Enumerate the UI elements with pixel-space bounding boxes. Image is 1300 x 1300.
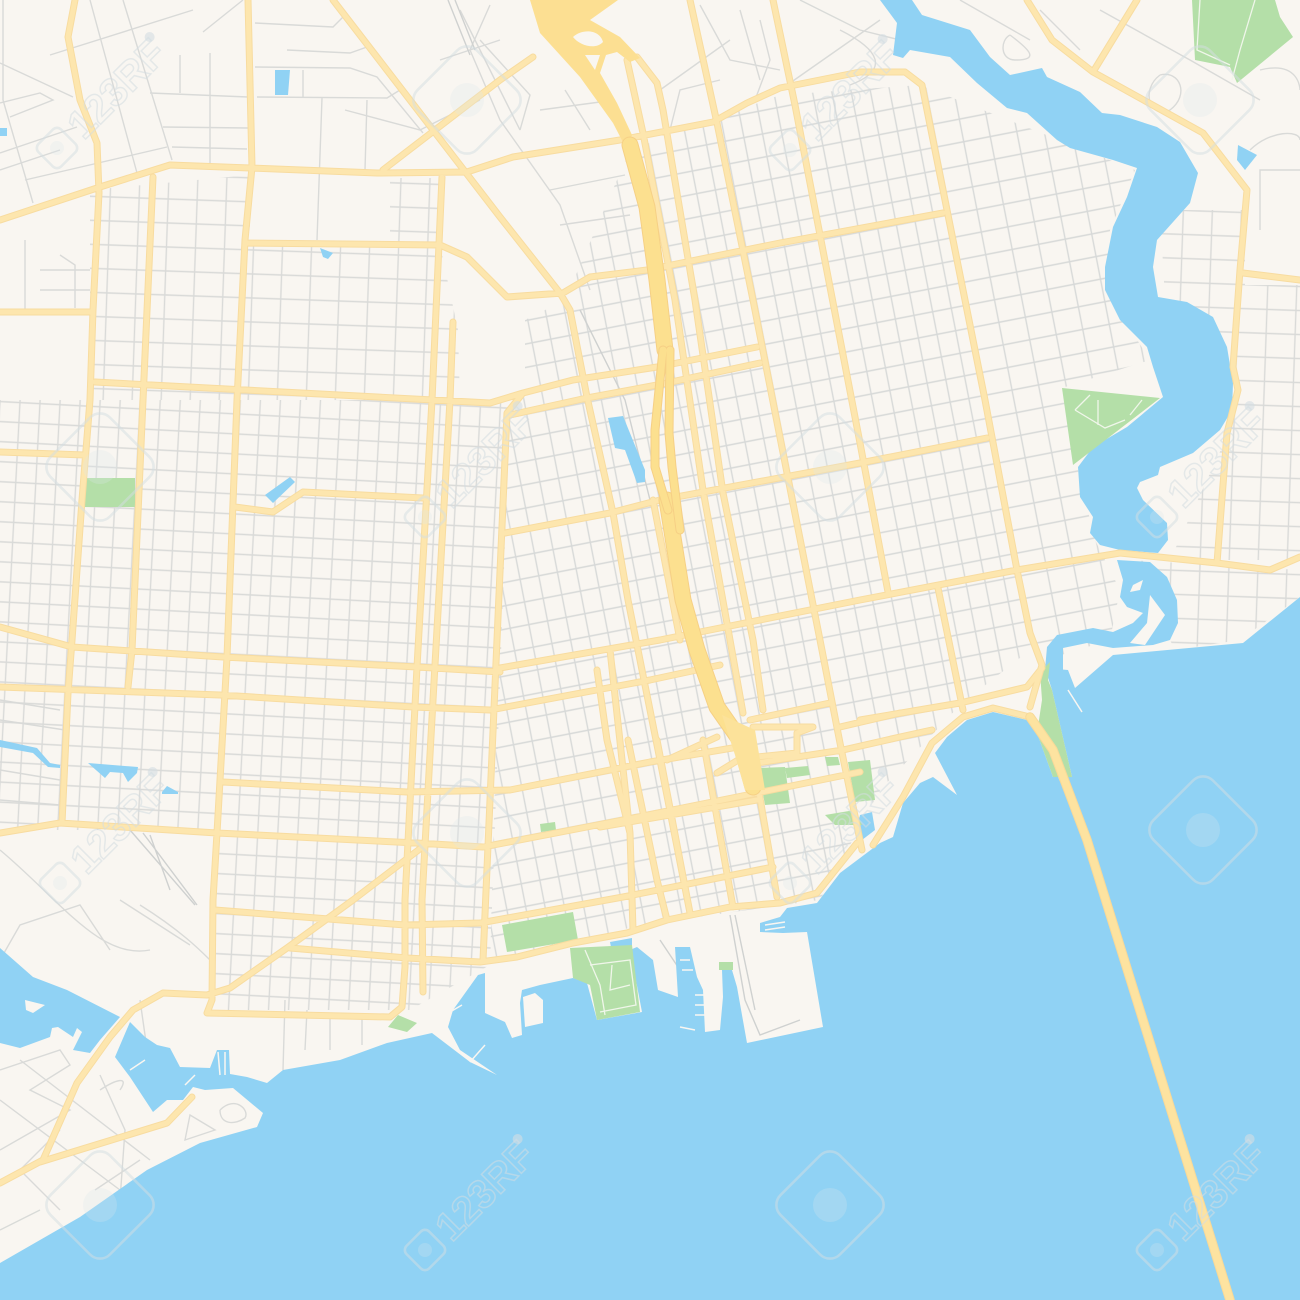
land: harbour pier — [523, 993, 543, 1027]
harbour piers — [130, 690, 1082, 1085]
interchange at top of freeway — [530, 0, 640, 150]
watermark: 123RF text logos: 123RF — [1159, 400, 1275, 516]
watermark: 123RF text logos: 123RF — [59, 31, 175, 147]
watermark: 123RF text logos: 123RF — [427, 1133, 543, 1249]
park paths — [585, 0, 1255, 1015]
watermark: 123RF text logos: 123RF — [427, 400, 543, 516]
water: river — [880, 0, 1233, 553]
freeway — [630, 145, 753, 787]
parks — [85, 0, 1293, 1032]
water: bay and harbour — [0, 597, 1300, 1300]
water: west bay — [0, 948, 120, 1053]
bridge — [1030, 717, 1230, 1300]
minor street grid — [0, 86, 1300, 1010]
watermark: 123RF text logos: 123RF — [62, 766, 178, 882]
watermark: 123RF text logos: 123RF — [792, 33, 908, 149]
watermark: 123RF text logos: 123RF — [792, 766, 908, 882]
interchange south of freeway — [722, 715, 765, 790]
watermark: 123RF text logos: 123RF — [1159, 1133, 1275, 1249]
ponds and small lakes — [0, 70, 1257, 952]
water: inlet east of downtown — [1045, 560, 1178, 670]
